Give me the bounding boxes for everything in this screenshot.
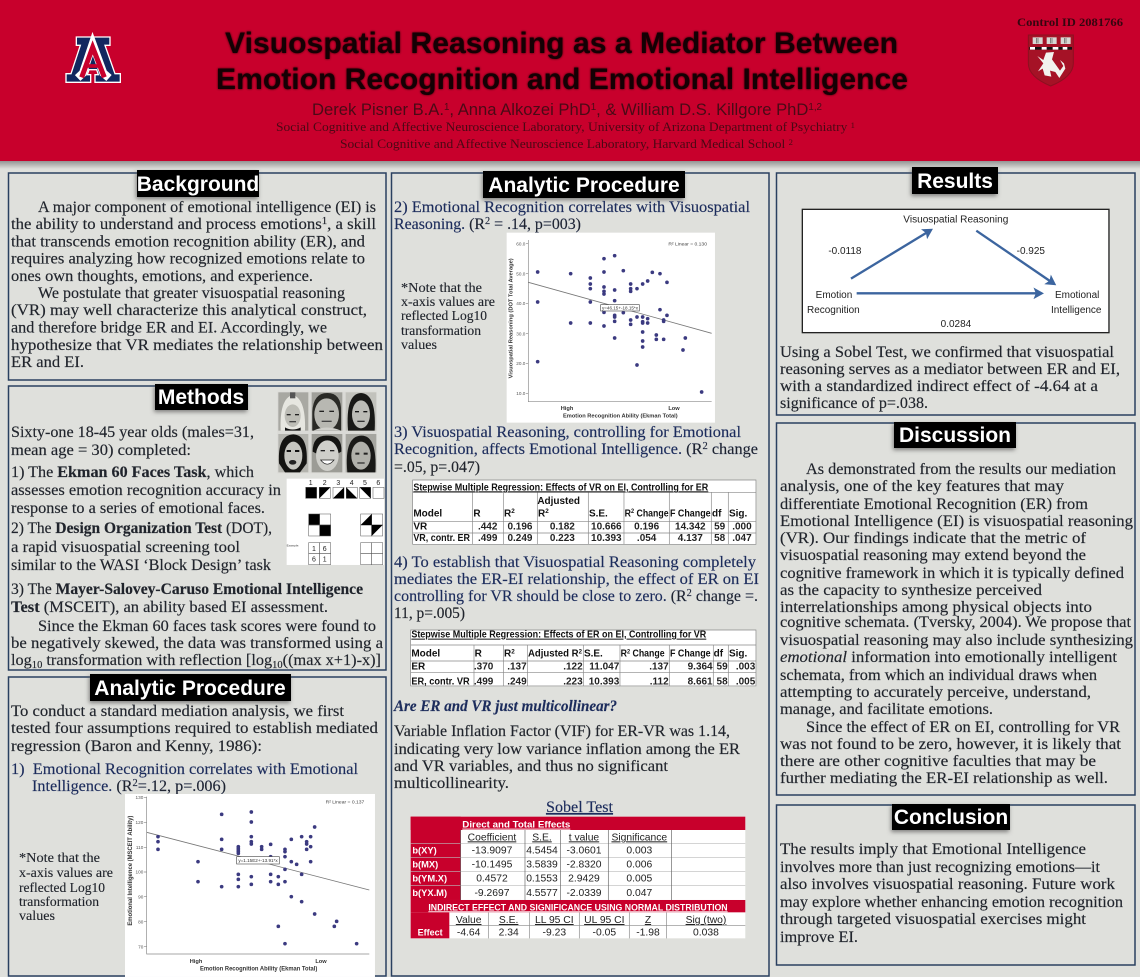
table: Sobel test: 3.5839 (526, 860, 558, 871)
text: methods: a rapid visuospatial screening tool (11, 539, 240, 556)
text: discussion: visuospatial reasoning may extend beyond the (780, 547, 1086, 564)
diagram: mediation model: -0.925 (1017, 246, 1045, 257)
table: effects of VR on EI: .054 (637, 533, 657, 544)
table: effects of VR on EI: .047 (732, 533, 752, 544)
text: background: the ability to understand and process emotions (11, 216, 299, 233)
panel: conclusion (776, 804, 1135, 965)
text: background: requires analyzing how recognized emotions relate to (11, 250, 365, 268)
table: effects of ER on EI: ER (411, 662, 425, 673)
chart: ER vs VR scatter: y=46.15+-18.15*x (602, 306, 638, 312)
table: Sobel test: t value (569, 832, 599, 843)
chart: ER vs VR scatter: High (561, 406, 574, 412)
heading: Sobel test: Sobel Test (546, 799, 614, 816)
authors: , Anna Alkozei PhD (449, 100, 591, 119)
table: effects of ER on EI: .122 (563, 662, 583, 673)
text: discussion: As demonstrated from the results our mediation (806, 461, 1116, 478)
chart: ER vs EI scatter: 110 (136, 845, 144, 850)
affiliations: 2 (789, 138, 793, 147)
text: step 4: 11, p=.005) (394, 605, 465, 622)
text: background: (VR) may well characterize this analytical construct, (11, 302, 367, 319)
heading: analytic procedure middle: Analytic Procedure (488, 174, 680, 197)
table: Sobel test: Coefficient (468, 832, 516, 843)
table: effects of VR on EI: 4.137 (678, 533, 703, 544)
panel: background (8, 170, 386, 380)
text: results: reasoning serves as a mediator between ER and EI, (780, 361, 1120, 378)
table: effects of ER on EI: .370 (474, 662, 494, 673)
chart: ER vs EI scatter: 70 (138, 944, 144, 949)
chart: ER vs EI scatter: R² Linear = 0.137 (326, 799, 365, 805)
heading: discussion: Discussion (899, 424, 1011, 447)
text: conclusion: The results imply that Emotional Intelligence (780, 841, 1086, 858)
table: Sobel test: S.E. (499, 915, 518, 926)
table: effects of ER on EI: 58 (717, 676, 728, 687)
table: effects of ER on EI: df (714, 649, 724, 660)
table: Sobel test: b(XY) (412, 845, 437, 855)
table: effects of ER on EI: Model (411, 649, 440, 660)
table: effects of ER on EI: F Change (670, 649, 711, 660)
image: block design task: Example: (287, 543, 299, 547)
control id: Control ID 2081766 (1017, 17, 1123, 29)
table: effects of VR on EI: Stepwise Multiple Regression: Effects of VR on EI, Controlling for ER (413, 482, 708, 493)
note: log10: reflected Log10 (19, 880, 105, 895)
text: multicollinearity heading: Are ER and VR just multicollinear? (393, 698, 617, 715)
text: assumptions intro (11, 703, 378, 755)
image: block design task: 6 (323, 546, 327, 553)
table: Sobel test: Direct and Total Effects (462, 820, 570, 830)
note: log10: x-axis values are (19, 865, 113, 880)
icon: University of Arizona logo (66, 37, 120, 82)
table: Sobel test: -9.2697 (474, 888, 510, 899)
table: effects of VR on EI: Sig. (729, 508, 747, 519)
table: effects of ER on EI: .112 (650, 676, 669, 687)
text: VIF: indicating very low variance inflation among the ER (394, 741, 741, 758)
text: methods: ((max x+1)-x)] (283, 652, 381, 669)
table: effects of VR on EI: Model (413, 508, 442, 519)
text: step 2: 2 (485, 216, 490, 227)
image: block design task (287, 479, 384, 565)
title: Visuospatial Reasoning as a Mediator Between (225, 27, 898, 60)
text: discussion (780, 461, 1133, 787)
table: Sobel test: Significance (611, 832, 667, 843)
table: Sobel test: 0.006 (626, 860, 652, 871)
chart: ER vs VR scatter: 20.0 (516, 361, 526, 366)
text: results: Using a Sobel Test, we confirmed that visuospatial (780, 344, 1114, 361)
text: background: A major component of emotional intelligence (EI) is (38, 199, 376, 216)
table: effects of ER on EI: Change (630, 649, 665, 660)
authors: 1 (591, 102, 597, 113)
note: log10: transformation (401, 323, 481, 338)
table: Sobel test: Sig (two) (686, 915, 726, 926)
chart: ER vs EI scatter: Emotional Intelligence (MSCEIT Ability) (128, 816, 134, 926)
note: log10: *Note that the (401, 280, 482, 295)
table: effects of ER on EI: 2 (511, 648, 515, 655)
table: Sobel test: -10.1495 (472, 860, 513, 871)
text: conclusion: improve EI. (780, 929, 858, 946)
affiliations: Social Cognitive and Affective Neuroscience Laboratory, University of Arizona Department of Psychiatry (276, 120, 806, 134)
chart: ER vs VR scatter: 40.0 (516, 301, 526, 306)
table: Sobel test: -3.0601 (566, 845, 602, 856)
table: Sobel test: -9.23 (543, 928, 566, 939)
table: effects of VR on EI: R (504, 508, 511, 519)
table: effects of ER on EI: Stepwise Multiple Regression: Effects of ER on EI, Controlling for VR (411, 630, 706, 641)
text: conclusion: involves more than just recognizing emotions—it (780, 859, 1101, 876)
note: log10: transformation (19, 894, 99, 909)
table: Sobel test: b(YM.X) (412, 874, 447, 884)
text: background: and therefore bridge ER and EI. Accordingly, we (11, 320, 327, 336)
text: discussion: there are other cognitive faculties that may be (780, 753, 1096, 770)
note: log10: x-axis values are (401, 294, 495, 309)
text: step 3: 3) Visuospatial Reasoning, controlling for Emotional (394, 424, 741, 441)
text: methods (11, 424, 383, 671)
image: block design task: 3 (336, 480, 340, 487)
table: effects of VR on EI: .000 (732, 521, 752, 532)
text: conclusion: also involves visuospatial reasoning. Future work (780, 876, 1115, 893)
note: log10: *Note that the (19, 850, 100, 865)
text: results (780, 344, 1120, 412)
text: step 4: 4) To establish that Visuospatial Reasoning completely (394, 554, 756, 571)
text: methods: 10 (272, 660, 283, 671)
table: effects of VR on EI: F Change (670, 508, 711, 519)
text: step 4: controlling for VR should be close to zero. (R (394, 588, 686, 605)
text: methods: response to a series of emotional faces. (11, 500, 265, 517)
diagram: mediation model: Intelligence (1051, 305, 1102, 316)
text: conclusion: through targeted visuospatial exercises might (780, 911, 1087, 928)
chart: ER vs EI scatter: High (190, 959, 203, 965)
text: discussion: analysis, one of the key features that may (780, 478, 1064, 495)
affiliations: 1 (851, 121, 855, 130)
heading: methods: Methods (158, 386, 244, 409)
table: effects of ER on EI: 8.661 (688, 676, 713, 687)
text: assumption 1: =.12, p=.006) (138, 778, 226, 795)
image: block design task: 6 (312, 556, 316, 563)
table: effects of ER on EI: .499 (474, 676, 494, 687)
title (216, 27, 908, 96)
text: assumptions intro: regression (Baron and Kenny, 1986): (11, 738, 262, 755)
table: effects of VR on EI: .442 (478, 521, 498, 532)
table: effects of VR on EI: 59 (714, 521, 726, 532)
text: VIF (394, 723, 741, 792)
table: Sobel test: S.E. (532, 832, 552, 843)
table: effects of VR on EI: 10.666 (591, 521, 622, 532)
chart: ER vs VR scatter: Visuospatial Reasoning (DOT Total Average) (509, 258, 515, 378)
text: methods: transformation with reflection [log (42, 652, 272, 669)
chart: ER vs EI scatter: 80 (138, 919, 144, 924)
text: discussion: attempting to accurately perceive, understand, (780, 684, 1091, 701)
text: methods: assesses emotion recognition accuracy in (11, 482, 281, 499)
text: discussion: cognitive framework in which it is typically defined (780, 565, 1124, 582)
text: step 4: mediates the ER-EI relationship, the effect of ER on EI (394, 571, 759, 588)
table: Sobel test: Z (645, 915, 651, 926)
text: step 4: change =. (692, 588, 758, 605)
table: effects of ER on EI: .249 (507, 676, 527, 687)
table: effects of VR on EI (413, 480, 756, 544)
heading: background: Background (137, 173, 259, 196)
table: effects of VR on EI: 0.249 (507, 533, 533, 544)
table: effects of VR on EI: 2 (545, 508, 549, 515)
table: effects of VR on EI: 2 (631, 508, 634, 515)
table: effects of ER on EI: R (621, 649, 628, 660)
table: Sobel test: b(YX.M) (412, 888, 447, 898)
text: assumption 1 (11, 761, 358, 795)
text: step 4 (394, 554, 759, 622)
text: VIF: Variable Inflation Factor (VIF) for ER-VR was 1.14, (394, 723, 730, 740)
table: effects of VR on EI: 58 (714, 533, 726, 544)
diagram: mediation model: Emotion (816, 290, 852, 301)
table: effects of VR on EI: 0.182 (550, 521, 575, 532)
text: conclusion (780, 841, 1123, 946)
table: Sobel test: 0.1553 (526, 874, 558, 885)
table: effects of VR on EI: 2 (511, 508, 515, 515)
image: block design task: 5 (363, 480, 367, 487)
text: step 3: Recognition, affects Emotional Intelligence. (R (394, 441, 702, 458)
table: effects of ER on EI: 10.393 (589, 676, 620, 687)
text: background: 1 (322, 216, 327, 227)
text: step 3: 2 (702, 441, 708, 452)
text: discussion: Since the effect of ER on EI, controlling for VR (806, 719, 1121, 736)
table: effects of ER on EI: .137 (507, 662, 527, 673)
table: effects of ER on EI: ER, contr. VR (411, 676, 470, 687)
text: discussion: Emotional Intelligence (EI) is visuospatial reasoning (780, 513, 1133, 530)
image: block design task: 2 (323, 480, 327, 487)
text: step 3: =.05, p=.047) (394, 459, 480, 476)
chart: ER vs VR scatter: R² Linear = 0.130 (668, 241, 707, 247)
authors: Derek Pisner B.A. (312, 100, 447, 119)
chart: ER vs VR scatter: 60.0 (516, 241, 526, 246)
text: background: ones own thoughts, emotions, and experience. (11, 268, 313, 285)
table: Sobel test: LL 95 CI (535, 915, 574, 926)
table: effects of VR on EI: VR, contr. ER (413, 533, 470, 544)
chart: ER vs EI scatter: 90 (138, 894, 144, 899)
table: Sobel test: -0.05 (593, 928, 616, 939)
chart: ER vs EI scatter: 120 (136, 820, 144, 825)
authors: 1 (444, 102, 450, 113)
table: effects of VR on EI: R (538, 508, 545, 519)
table: Sobel test: 2.34 (499, 928, 519, 939)
diagram: mediation model: Recognition (807, 305, 860, 316)
note: log10 (401, 280, 495, 352)
table: effects of ER on EI: Sig. (729, 649, 747, 660)
table: effects of VR on EI: Adjusted (537, 496, 580, 507)
table: Sobel test: -2.8320 (566, 860, 602, 871)
text: discussion: (VR). Our findings indicate that the metric of (780, 530, 1087, 547)
panel: methods (8, 384, 386, 671)
text: step 3: change (708, 441, 758, 458)
chart: ER vs VR scatter: 10.0 (516, 391, 526, 396)
text: discussion: manage, and facilitate emotions. (780, 701, 993, 718)
table: effects of VR on EI: df (712, 508, 722, 519)
diagram: mediation model (802, 209, 1109, 333)
table: Sobel test: -1.98 (636, 928, 660, 939)
text: assumption 1: 1) Emotional Recognition correlates with Emotional (11, 761, 358, 778)
text: conclusion: may explore whether enhancing emotion recognition (780, 894, 1123, 911)
chart: ER vs EI scatter: 100 (136, 870, 144, 875)
table: Sobel test: 4.5577 (526, 888, 558, 899)
title: Emotion Recognition and Emotional Intelligence (216, 63, 908, 96)
table: Sobel test: 2.9429 (568, 874, 600, 885)
text: results: with a standardized indirect effect of -4.64 at a (780, 378, 1098, 395)
image: block design task: 6 (376, 480, 380, 487)
title: Visuospatial Reasoning as a Mediator Between (225, 27, 898, 60)
table: Sobel test: b(MX) (412, 859, 438, 869)
icon: Harvard shield (1028, 35, 1073, 86)
table: effects of VR on EI: .499 (478, 533, 498, 544)
note: log10: reflected Log10 (401, 308, 487, 323)
text: methods: 1) The Ekman 60 Faces Task , which (11, 464, 254, 481)
diagram: mediation model: -0.0118 (828, 246, 862, 257)
table: Sobel test: Value (456, 915, 482, 926)
table: effects of ER on EI: .223 (563, 676, 583, 687)
chart: ER vs EI scatter: Low (315, 959, 327, 965)
panel: discussion (776, 422, 1135, 795)
table: effects of ER on EI: R (504, 649, 511, 660)
text: methods: 3) The Mayer-Salovey-Caruso Emotional Intelligence (11, 581, 363, 598)
diagram: mediation model: 0.0284 (941, 319, 972, 330)
table: effects of ER on EI: 2 (579, 648, 582, 655)
note: log10: values (401, 337, 437, 352)
table: Sobel test: 0.047 (626, 888, 652, 899)
table: Sobel test: UL 95 CI (584, 915, 625, 926)
image: block design task: 1 (323, 556, 327, 563)
table: effects of VR on EI: 0.196 (634, 521, 660, 532)
table: effects of VR on EI: S.E. (589, 508, 608, 519)
heading: results: Results (917, 170, 993, 193)
text: methods: 10 (32, 660, 42, 671)
table: effects of ER on EI (411, 630, 756, 687)
table: Sobel test: -2.0339 (566, 888, 602, 899)
chart: ER vs VR scatter (507, 233, 715, 423)
table: Sobel test: 0.038 (693, 928, 719, 939)
table: effects of VR on EI: Change (634, 508, 669, 519)
chart: ER vs EI scatter (125, 794, 375, 977)
text: discussion: interrelationships among physical objects into (780, 599, 1092, 616)
text: background: ER and EI. (11, 354, 84, 371)
text: results: significance of p=.038. (780, 395, 928, 412)
text: methods: Test (MSCEIT), an ability based EI assessment. (11, 599, 328, 616)
table: Sobel test: -13.9097 (472, 845, 513, 856)
text: background: hypothesize that VR mediates the relationship between (11, 337, 383, 354)
panel: analytic procedure middle (392, 171, 769, 976)
text: discussion: emotional information into emotionally intelligent (780, 649, 1118, 666)
text: background (11, 199, 383, 371)
text: step 2: Reasoning. (R (394, 216, 485, 233)
heading: analytic procedure left: Analytic Procedure (94, 677, 286, 700)
table: effects of VR on EI: 10.393 (591, 533, 622, 544)
table: Sobel test: 0.005 (626, 874, 652, 885)
diagram: mediation model: Emotional (1055, 290, 1099, 301)
text: methods: 2) The Design Organization Test (DOT), (11, 520, 272, 537)
table: effects of ER on EI: 11.047 (589, 662, 620, 673)
text: VIF: and VR variables, and thus no significant (394, 758, 669, 775)
text: methods: Since the Ekman 60 faces task scores were found to (38, 618, 376, 635)
text: VIF: multicollinearity. (394, 775, 509, 792)
table: effects of ER on EI: .137 (649, 662, 669, 673)
table: Sobel test: 0.4572 (476, 874, 508, 885)
table: effects of ER on EI: R (475, 649, 482, 660)
image: Ekman faces (277, 392, 377, 473)
table: effects of VR on EI: 0.223 (550, 533, 575, 544)
text: background: that transcends emotion recognition ability (ER), and (11, 234, 365, 250)
table: effects of VR on EI: 14.342 (675, 521, 706, 532)
text: methods: log (11, 652, 31, 669)
table: Sobel test: INDIRECT EFFECT AND SIGNIFICANCE USING NORMAL DISTRIBUTION (428, 902, 728, 912)
text: discussion: as the capacity to synthesize perceived (780, 582, 1042, 599)
image: block design task: 1 (309, 480, 313, 487)
text: step 2: 2) Emotional Recognition correlates with Visuospatial (394, 199, 750, 216)
diagram: mediation model: Visuospatial Reasoning (903, 214, 1008, 225)
header banner (0, 0, 1140, 169)
chart: ER vs VR scatter: Emotion Recognition Ability (Ekman Total) (563, 413, 678, 419)
table: effects of VR on EI: VR (413, 521, 427, 532)
note: log10 (19, 850, 113, 923)
table: effects of VR on EI: 0.196 (507, 521, 533, 532)
text: step 2: = .14, p=003) (490, 216, 581, 233)
chart: ER vs VR scatter: 30.0 (516, 331, 526, 336)
text: background: , a skill (327, 216, 376, 233)
affiliations: Social Cognitive and Affective Neuroscience Laboratory, Harvard Medical School (340, 137, 752, 151)
text: assumptions intro: tested four assumptions required to establish mediated (11, 720, 378, 737)
table: Sobel test: Effect (418, 927, 443, 937)
text: discussion: cognitive schemata. (Tversky, 2004). We propose that (780, 614, 1132, 631)
chart: ER vs VR scatter: Low (668, 406, 680, 412)
text: background: We postulate that greater visuospatial reasoning (38, 285, 345, 302)
table: effects of ER on EI: S.E. (584, 649, 603, 660)
text: discussion: visuospatial reasoning may also include synthesizing (780, 632, 1133, 649)
affiliations (276, 120, 855, 151)
text: methods: be negatively skewed, the data was transformed using a (11, 635, 383, 652)
table: Sobel test (411, 817, 745, 939)
image: block design task: 1 (312, 546, 316, 553)
table: effects of ER on EI: 9.364 (688, 662, 713, 673)
text: step 2 (394, 199, 750, 233)
panel: results (776, 167, 1135, 415)
image: block design task: 4 (350, 480, 354, 487)
title: Emotion Recognition and Emotional Intelligence (216, 63, 908, 96)
note: log10: values (19, 908, 55, 923)
chart: ER vs EI scatter: 130 (136, 795, 144, 800)
table: effects of ER on EI: 59 (717, 662, 728, 673)
table: effects of VR on EI: R (473, 508, 481, 519)
text: discussion: differentiate Emotional Recognition (ER) from (780, 496, 1088, 513)
text: step 4: 2 (687, 588, 692, 599)
table: effects of ER on EI: Adjusted R (528, 649, 581, 660)
table: Sobel test: -4.64 (457, 928, 481, 939)
text: discussion: was not found to be zero, however, it is likely that (780, 736, 1122, 753)
panel: analytic procedure left (8, 674, 386, 977)
text: discussion: schemata, from which an individual draws when (780, 667, 1097, 684)
chart: ER vs VR scatter: 50.0 (516, 271, 526, 276)
authors: 1,2 (808, 102, 822, 113)
table: Sobel test: 4.5454 (526, 845, 558, 856)
text: discussion: further mediating the ER-EI relationship as well. (780, 770, 1108, 787)
chart: ER vs EI scatter: y=1.15E2+-13.91*x (238, 858, 278, 864)
heading: conclusion: Conclusion (894, 806, 1008, 829)
text: methods: mean age = 30) completed: (11, 442, 191, 459)
text: assumptions intro: To conduct a standard mediation analysis, we first (11, 703, 345, 720)
table: effects of ER on EI: .005 (736, 676, 756, 687)
text: methods: Sixty-one 18-45 year olds (males=31, (11, 424, 254, 441)
authors: , & William D.S. Killgore PhD (596, 100, 808, 119)
chart: ER vs EI scatter: Emotion Recognition Ability (Ekman Total) (200, 966, 317, 972)
text: assumption 1: Intelligence. (R (32, 778, 132, 795)
table: effects of ER on EI: 2 (627, 648, 630, 655)
table: effects of VR on EI: R (625, 508, 632, 519)
text: step 3 (394, 424, 758, 476)
text: methods: similar to the WASI ‘Block Design’ task (11, 557, 271, 574)
table: effects of ER on EI: .003 (736, 662, 756, 673)
table: Sobel test: 0.003 (626, 845, 652, 856)
text: assumption 1: 2 (133, 778, 138, 789)
